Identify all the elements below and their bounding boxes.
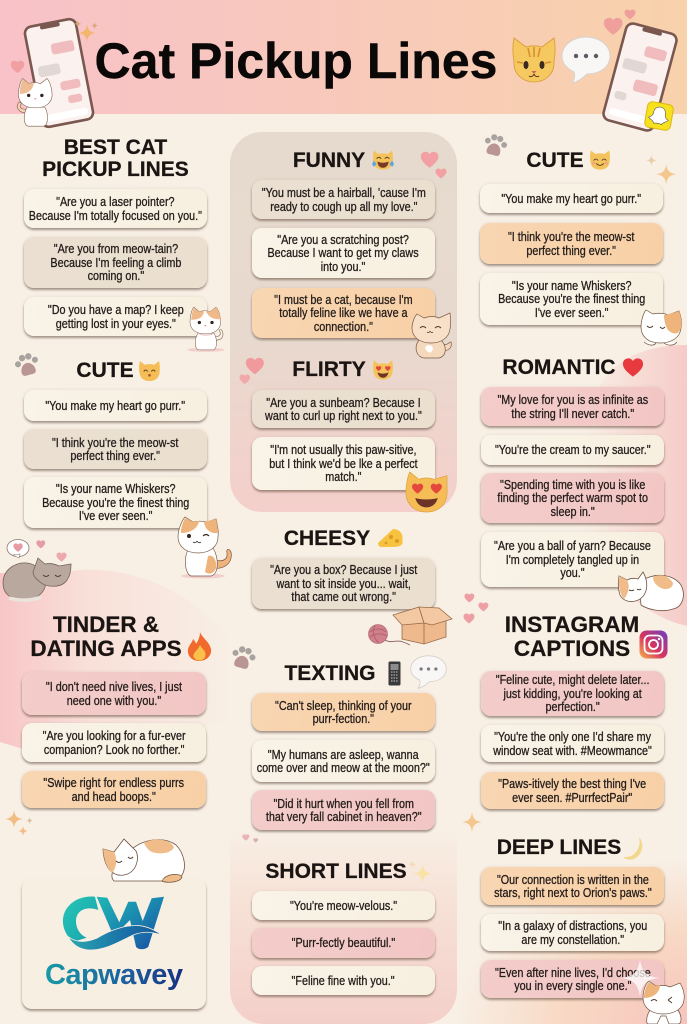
icon: sparkles left	[5, 810, 33, 836]
line card	[481, 387, 664, 426]
line card: "Are you a ball of yarn? Because	[494, 538, 651, 553]
panel: cute right	[480, 150, 663, 325]
line card: purr-fection."	[313, 711, 374, 726]
line card	[24, 189, 207, 228]
icon: fire emoji	[188, 632, 212, 661]
icon: yarn ball	[368, 624, 410, 646]
line card: into you."	[321, 259, 366, 274]
line card: "You're meow-velous."	[290, 898, 397, 913]
line card: window seat with. #Meowmance"	[493, 742, 652, 758]
line card	[481, 671, 664, 716]
line card: "My love for you is as infinite as	[497, 392, 648, 407]
line card: Because I'm totally focused on you."	[29, 208, 202, 222]
heading: TINDER &	[53, 612, 159, 637]
icon: hearts beside funny	[420, 152, 446, 178]
icon: instagram logo	[639, 630, 668, 659]
icon: laughing cat emoji	[372, 150, 394, 170]
icon: left header hearts and sparkles	[10, 20, 98, 73]
line card	[481, 960, 664, 998]
line card: sleep in."	[550, 504, 595, 519]
line card: "I think you're the meow-st	[52, 435, 179, 450]
line card	[22, 723, 206, 762]
icon: small hearts	[242, 834, 258, 842]
line card: finding the perfect warm spot to	[497, 490, 648, 505]
icon: big heart-eyes cat	[406, 471, 448, 512]
line card: I'm completely tangled up in	[506, 552, 639, 567]
icon: calico kitten sitting	[178, 516, 232, 578]
icon: calico kitten in header	[16, 78, 52, 126]
icon: kitten peeking right	[639, 308, 683, 347]
line card	[252, 928, 435, 958]
line card: "Even after nine lives, I'd choose	[495, 965, 650, 980]
line card: want to curl up right next to you."	[265, 408, 422, 423]
line card: "Can't sleep, thinking of your	[275, 698, 412, 713]
heading: DATING APPS	[30, 636, 182, 661]
icon: crescent moon	[622, 836, 646, 861]
line card: "You're the only one I'd share my	[494, 729, 651, 744]
line card: "I think you're the meow-st	[508, 229, 635, 244]
line card: are my constellation."	[521, 932, 624, 946]
line card	[24, 477, 207, 528]
heading: flirty: FLIRTY	[292, 358, 366, 381]
line card: ever seen. #PurrfectPair"	[512, 790, 633, 804]
line card: "Swipe right for endless purrs	[44, 775, 184, 790]
line card: "I don't need nive lives, I just	[46, 679, 182, 694]
line card: "You must be a hairball, 'cause I'm	[261, 185, 426, 200]
line card: match."	[325, 469, 362, 484]
line card: "Are you looking for a fur-ever	[43, 728, 185, 743]
panel: instagram captions	[481, 613, 664, 809]
panel: funny and flirty	[230, 132, 457, 512]
line card	[22, 672, 206, 715]
icon: sleeping gray cat with heart bubble	[2, 539, 72, 602]
line card	[480, 223, 663, 264]
icon: snapchat badge	[644, 101, 674, 131]
icon: sleeping calico right	[617, 571, 685, 613]
line card	[252, 740, 435, 782]
line card: just kidding, you're looking at	[503, 686, 642, 701]
line card: getting lost in your eyes."	[55, 316, 176, 330]
icon: smiling cat emoji	[589, 149, 611, 171]
panel: deep lines	[481, 837, 664, 998]
line card: coming on."	[87, 268, 144, 283]
line card	[252, 790, 435, 830]
panel: cheesy	[250, 527, 437, 612]
line card: companion? Look no forther."	[44, 742, 184, 756]
line card: Because I want to get my claws	[268, 245, 419, 260]
line card	[252, 966, 435, 995]
line card: but I think we'd be lke a perfect	[269, 456, 418, 471]
line card: that came out wrong."	[291, 589, 396, 604]
panel: cute left	[22, 359, 209, 532]
icon: phone emoji	[388, 662, 400, 686]
line card: I've ever seen."	[79, 508, 152, 523]
icon: paw left	[15, 353, 38, 376]
icon: speech bubble emoji	[562, 36, 610, 84]
line card: want to sit inside you... wait,	[276, 576, 411, 591]
heading	[30, 612, 182, 661]
panel: texting	[250, 655, 446, 834]
icon: kissing cat emoji	[139, 361, 160, 381]
icon: right phone with chat	[602, 22, 678, 132]
line card: "Did it hurt when you fell from	[273, 796, 414, 811]
line card: Because you're the finest thing	[498, 291, 645, 306]
line card: "My humans are asleep, wanna	[268, 747, 419, 762]
line card: "In a galaxy of distractions, you	[498, 918, 647, 933]
line card	[481, 914, 664, 951]
capwavey logo	[45, 896, 183, 991]
line card: "You make my heart go purr."	[46, 398, 185, 413]
line card: you."	[560, 565, 585, 580]
panel: short lines	[230, 832, 457, 1024]
line card: need one with you."	[67, 692, 161, 708]
line card	[252, 437, 435, 490]
heading: ROMANTIC	[502, 356, 616, 379]
line card	[252, 390, 435, 428]
line card: "I'm not usually this paw-sitive,	[270, 442, 417, 457]
line card: "Is your name Whiskers?	[56, 481, 175, 496]
panel: best cat pickup lines	[22, 136, 209, 340]
icon: cheese	[378, 529, 402, 547]
title: Cat Pickup Lines	[95, 33, 497, 89]
line card	[252, 891, 435, 920]
line card	[481, 772, 664, 809]
line card: "Are you a box? Because I just	[270, 562, 417, 577]
line card: ready to cough up all my love."	[270, 198, 417, 214]
line card	[480, 184, 663, 213]
heading: BEST CAT	[64, 136, 167, 159]
icon: right header hearts	[604, 10, 636, 35]
heading: funny: FUNNY	[293, 149, 365, 172]
icon: hearts beside flirty	[240, 358, 264, 384]
icon: left phone with chat	[24, 18, 94, 128]
line card	[480, 273, 663, 325]
line card: "You make my heart go purr."	[502, 191, 641, 206]
icon: speech bubble	[410, 655, 446, 689]
line card: perfect thing ever."	[71, 448, 160, 463]
line card: "Are you a scratching post?	[278, 232, 409, 247]
icon: sparkles top right	[646, 155, 676, 184]
line card	[24, 297, 207, 336]
icon: cat face emoji	[512, 37, 556, 82]
line card: perfect thing ever."	[527, 242, 616, 258]
line card: that very fall cabinet in heaven?"	[266, 809, 421, 824]
icon: heart-eyes cat emoji	[373, 360, 393, 380]
line card: Because I'm feeling a climb	[50, 255, 181, 270]
icon: sleeping calico on logo	[102, 838, 185, 883]
heading: PICKUP LINES	[42, 158, 189, 181]
line card	[252, 180, 435, 219]
line card	[481, 725, 664, 762]
icon: kitten on best lines card	[188, 306, 224, 352]
icon: white sparkle	[621, 958, 659, 998]
line card: "Do you have a map? I keep	[48, 302, 183, 317]
icon: red heart emoji	[622, 357, 644, 378]
line card	[252, 288, 435, 338]
icon: cream kitten on funny card	[412, 312, 452, 358]
line card	[252, 228, 435, 278]
heading: CUTE	[526, 149, 584, 172]
line card: and head boops."	[72, 788, 156, 804]
line card	[481, 532, 664, 587]
line card: "Feline cute, might delete later...	[496, 672, 649, 687]
icon: paw center	[232, 646, 256, 669]
line card: Because you're the finest thing	[42, 495, 189, 510]
line card: "Spending time with you is like	[500, 477, 645, 492]
line card: "Is your name Whiskers?	[512, 278, 631, 293]
line card: stars, right next to Orion's paws."	[494, 885, 651, 900]
line card: perfection."	[545, 699, 600, 714]
heading: TEXTING	[284, 662, 376, 685]
icon: sparkle center right	[462, 811, 482, 833]
line card: connection."	[314, 319, 373, 334]
line card	[481, 473, 664, 523]
heading: INSTAGRAM	[505, 612, 639, 637]
heading	[492, 613, 652, 661]
line card: the string I'll never catch."	[511, 406, 634, 420]
line card: you in every single one."	[514, 978, 631, 993]
line card	[481, 435, 664, 465]
capwavey logo: Capwavey	[45, 959, 183, 991]
line card: "I must be a cat, because I'm	[274, 292, 413, 307]
heading: CUTE	[76, 359, 134, 382]
line card: "Are you a laser pointer?	[56, 194, 175, 209]
line card	[481, 867, 664, 905]
panel: tinder and dating apps	[20, 612, 212, 812]
heading: SHORT LINES	[265, 860, 407, 883]
icon: sparkles emoji	[408, 860, 432, 883]
line card: "Are you from meow-tain?	[53, 241, 178, 256]
icon: hearts near instagram	[463, 593, 493, 626]
line card	[252, 693, 435, 731]
panel: romantic	[481, 357, 664, 587]
line card	[24, 429, 207, 469]
icon: kitten bottom right	[642, 980, 686, 1024]
heading: CHEESY	[284, 527, 370, 550]
logo card	[22, 878, 206, 1009]
line card: "You're the cream to my saucer."	[495, 442, 650, 457]
icon: cardboard box	[392, 606, 453, 644]
line card: "Paws-itively the best thing I've	[498, 776, 647, 791]
line card	[22, 771, 206, 808]
icon: paw right	[485, 134, 507, 156]
line card: "Purr-fectly beautiful."	[292, 935, 395, 950]
line card: "Our connection is written in the	[497, 872, 648, 887]
line card	[24, 237, 207, 288]
line card: "Are you a sunbeam? Because I	[266, 395, 421, 410]
line card: come over and meow at the moon?"	[257, 760, 430, 775]
line card: "Feline fine with you."	[292, 973, 395, 988]
line card	[252, 558, 435, 609]
line card: totally feline like we have a	[279, 305, 408, 320]
heading	[42, 136, 189, 181]
line card: I've ever seen."	[535, 305, 608, 320]
heading: CAPTIONS	[514, 636, 630, 661]
line card	[24, 390, 207, 421]
heading: DEEP LINES	[497, 836, 621, 859]
